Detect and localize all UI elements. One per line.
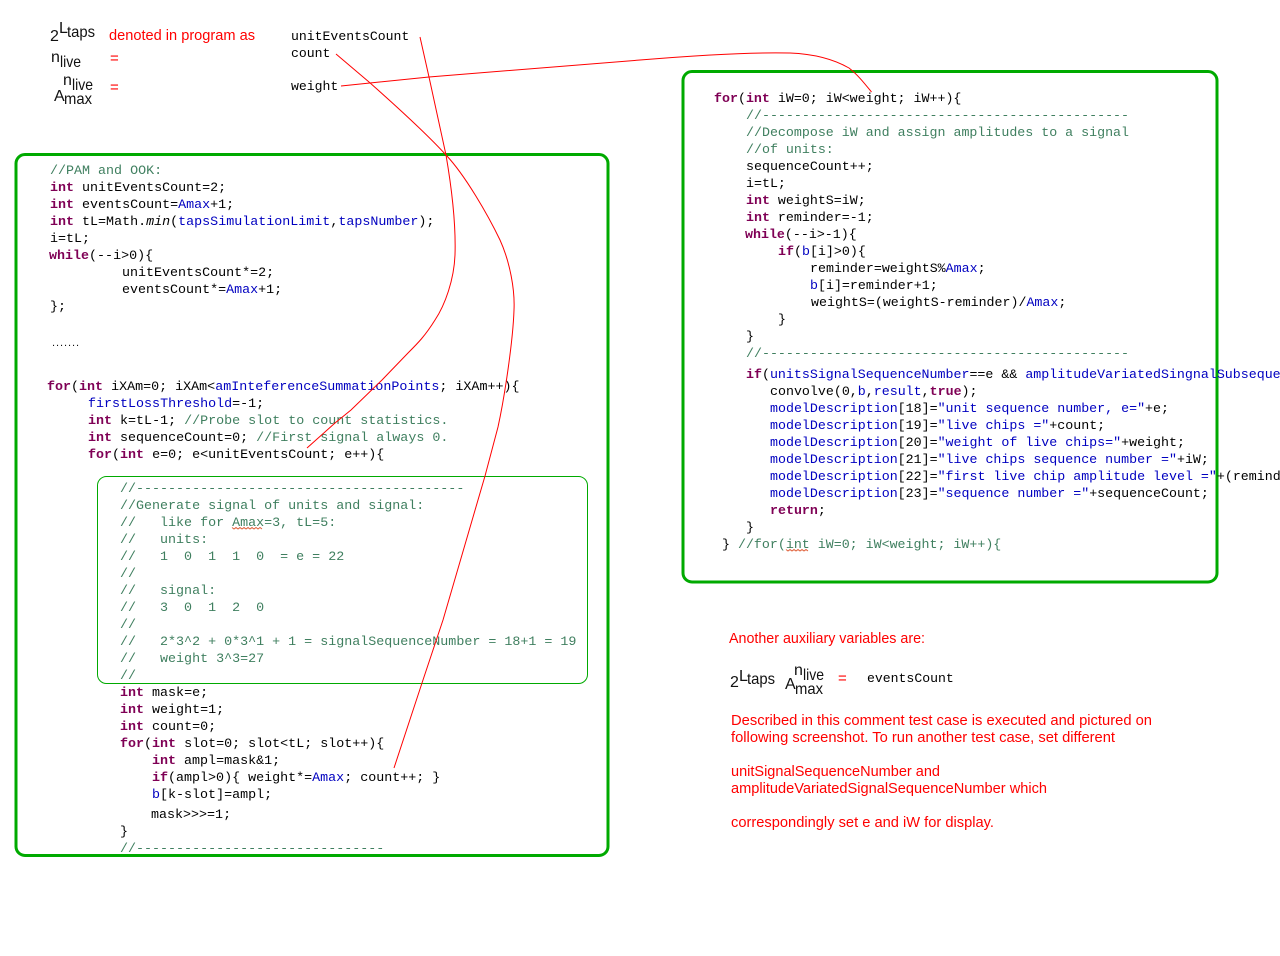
- formula: Amax to the n live: live: [72, 77, 93, 94]
- text block: test case explanation: [731, 712, 1152, 831]
- code: mask weight and count loop: }: [120, 825, 128, 840]
- code: setup of counts: [49, 164, 434, 315]
- callout: comment block explaining signal generation: // 1 0 1 1 0 = e = 22: [120, 550, 344, 565]
- code: mask weight and count loop: b[k-slot]=ampl;: [152, 788, 272, 803]
- code: mask weight and count loop: int mask=e;: [120, 686, 208, 701]
- formula: eventsCount definition: live: [803, 667, 824, 684]
- formula: 2^Ltaps: L: [59, 20, 68, 37]
- code: display of test case: modelDescription[20]="weight of live chips="+weight;: [770, 435, 1185, 450]
- equals sign: =: [110, 50, 119, 67]
- code: decomposition loop: sequenceCount++;: [746, 159, 874, 174]
- callout: comment block explaining signal generation: // units:: [120, 533, 208, 548]
- callout: comment block explaining signal generation: // signal:: [120, 584, 216, 599]
- code: outer loops: [47, 380, 519, 463]
- code: outer loops: int k=tL-1; //Probe slot to count statistics.: [88, 414, 448, 429]
- formula: 2^Ltaps: taps: [67, 24, 95, 41]
- code: outer loops: firstLossThreshold=-1;: [88, 397, 264, 412]
- code: decomposition loop: int reminder=-1;: [746, 210, 874, 225]
- formula: 2^Ltaps: 2: [50, 28, 59, 45]
- code: decomposition loop: i=tL;: [746, 176, 786, 191]
- code: decomposition loop: b[i]=reminder+1;: [810, 278, 938, 293]
- panel border: [16, 154, 608, 856]
- callout: comment block explaining signal generation: //Generate signal of units and signal:: [120, 499, 424, 514]
- code: setup of counts: };: [50, 300, 66, 315]
- code: display of test case: return;: [770, 503, 826, 518]
- code: setup of counts: while(--i>0){: [49, 249, 153, 264]
- code: setup of counts: int unitEventsCount=2;: [50, 181, 226, 196]
- panel: signal generation code: [16, 154, 608, 857]
- callout: comment block explaining signal generation: // 3 0 1 2 0: [120, 601, 264, 616]
- program name: unitEventsCount: unitEventsCount: [291, 29, 409, 44]
- formula: eventsCount definition: A: [785, 676, 796, 693]
- code: setup of counts: unitEventsCount*=2;: [122, 266, 274, 281]
- panel: weight decomposition code: [683, 72, 1280, 582]
- code: display of test case: }: [746, 520, 754, 535]
- code: decomposition loop: reminder=weightS%Amax;: [810, 261, 986, 276]
- formula: n live: n: [51, 49, 60, 66]
- arrow: count link: [336, 54, 514, 768]
- text block: test case explanation: Described in this comment test case is executed and pictured on: [731, 712, 1152, 729]
- code: mask weight and count loop: int count=0;: [120, 720, 216, 735]
- formula: Amax to the n live: [54, 72, 93, 108]
- program name: weight: weight: [291, 79, 338, 94]
- text block: test case explanation: unitSignalSequenceNumber and: [731, 763, 940, 780]
- formula: n live: live: [60, 54, 81, 71]
- formula: 2^Ltaps: [50, 20, 95, 45]
- code: decomposition loop: int weightS=iW;: [746, 193, 866, 208]
- code: decomposition loop: [714, 91, 1129, 361]
- formula: eventsCount definition: n: [794, 662, 803, 679]
- code: display of test case: modelDescription[23]="sequence number ="+sequenceCount;: [770, 486, 1209, 501]
- code: decomposition loop: while(--i>-1){: [745, 227, 857, 242]
- code: decomposition loop: //----------------------------------------------: [746, 346, 1129, 361]
- code: decomposition loop: }: [778, 312, 786, 327]
- formula: eventsCount definition: 2: [730, 674, 739, 691]
- code: outer loops: for(int e=0; e<unitEventsCount; e++){: [88, 448, 384, 463]
- code: setup of counts: //PAM and OOK:: [50, 164, 162, 179]
- arrow: weight link: [341, 53, 872, 92]
- formula: eventsCount definition: taps: [747, 671, 775, 688]
- formula: Amax to the n live: n: [63, 72, 72, 89]
- callout: comment block explaining signal generation: //: [120, 669, 136, 684]
- callout: comment block explaining signal generation: // like for Amax=3, tL=5:: [120, 516, 336, 531]
- code: mask weight and count loop: int ampl=mask&1;: [152, 754, 280, 769]
- code: outer loops: int sequenceCount=0; //First signal always 0.: [88, 431, 448, 446]
- equals sign: =: [110, 79, 119, 96]
- formula: eventsCount definition: L: [739, 668, 748, 685]
- code: decomposition loop: weightS=(weightS-reminder)/Amax;: [811, 295, 1066, 310]
- heading: another auxiliary variables: Another auxiliary variables are:: [729, 630, 925, 647]
- code: mask weight and count loop: [120, 686, 440, 857]
- formula: eventsCount definition: eventsCount: [867, 671, 954, 686]
- code: decomposition loop: //Decompose iW and assign amplitudes to a signal: [746, 125, 1129, 140]
- callout: comment block explaining signal generation: // 2*3^2 + 0*3^1 + 1 = signalSequenceNumber = 18+1 = 19: [120, 635, 576, 650]
- code: display of test case: } //for(int iW=0; iW<weight; iW++){: [722, 537, 1001, 552]
- callout: comment block explaining signal generation: //-----------------------------------------: [120, 482, 464, 497]
- code: display of test case: modelDescription[21]="live chips sequence number ="+iW;: [770, 452, 1209, 467]
- formula: eventsCount definition: [730, 662, 954, 698]
- code: mask weight and count loop: int weight=1;: [120, 703, 224, 718]
- callout: comment block explaining signal generation: //: [120, 567, 136, 582]
- code: mask weight and count loop: mask>>>=1;: [151, 808, 231, 823]
- callout: comment block explaining signal generation: [98, 476, 588, 684]
- code: setup of counts: int tL=Math.min(tapsSimulationLimit,tapsNumber);: [50, 215, 434, 230]
- arrow: unitEventsCount link: [307, 37, 455, 448]
- code: display of test case: modelDescription[18]="unit sequence number, e="+e;: [770, 401, 1169, 416]
- formula: Amax to the n live: max: [64, 91, 92, 108]
- callout: comment block explaining signal generation: //: [120, 618, 136, 633]
- formula: eventsCount definition: max: [795, 681, 823, 698]
- code: mask weight and count loop: for(int slot=0; slot<tL; slot++){: [120, 737, 384, 752]
- code: display of test case: modelDescription[19]="live chips ="+count;: [770, 418, 1105, 433]
- code: decomposition loop: for(int iW=0; iW<weight; iW++){: [714, 91, 961, 106]
- formula: Amax to the n live: A: [54, 88, 65, 105]
- heading: denoted in program as: denoted in program as: [109, 27, 255, 44]
- text block: test case explanation: correspondingly set e and iW for display.: [731, 814, 994, 831]
- formula: n live: [51, 49, 81, 71]
- legend: symbols and program names: [50, 20, 409, 108]
- code: mask weight and count loop: if(ampl>0){ weight*=Amax; count++; }: [152, 771, 440, 786]
- code: mask weight and count loop: //-------------------------------: [120, 842, 384, 857]
- code: outer loops: for(int iXAm=0; iXAm<amInteferenceSummationPoints; iXAm++){: [47, 380, 519, 395]
- code: display of test case: [722, 367, 1280, 552]
- code: setup of counts: eventsCount*=Amax+1;: [122, 283, 282, 298]
- text block: test case explanation: following screenshot. To run another test case, set different: [731, 729, 1116, 746]
- code: decomposition loop: //of units:: [746, 142, 834, 157]
- code: setup of counts: i=tL;: [50, 232, 90, 247]
- formula: eventsCount definition: =: [838, 670, 847, 687]
- notes: auxiliary variables: [729, 630, 1152, 831]
- text block: test case explanation: amplitudeVariatedSignalSequenceNumber which: [731, 780, 1047, 797]
- ellipsis: .......: [52, 337, 79, 349]
- code: decomposition loop: if(b[i]>0){: [778, 244, 866, 259]
- panel border: [683, 72, 1217, 582]
- code: display of test case: convolve(0,b,result,true);: [770, 384, 978, 399]
- code: setup of counts: int eventsCount=Amax+1;: [50, 198, 234, 213]
- callout: comment block explaining signal generation: // weight 3^3=27: [120, 652, 264, 667]
- code: decomposition loop: }: [746, 329, 754, 344]
- program name: count: count: [291, 46, 330, 61]
- code: decomposition loop: //----------------------------------------------: [746, 108, 1129, 123]
